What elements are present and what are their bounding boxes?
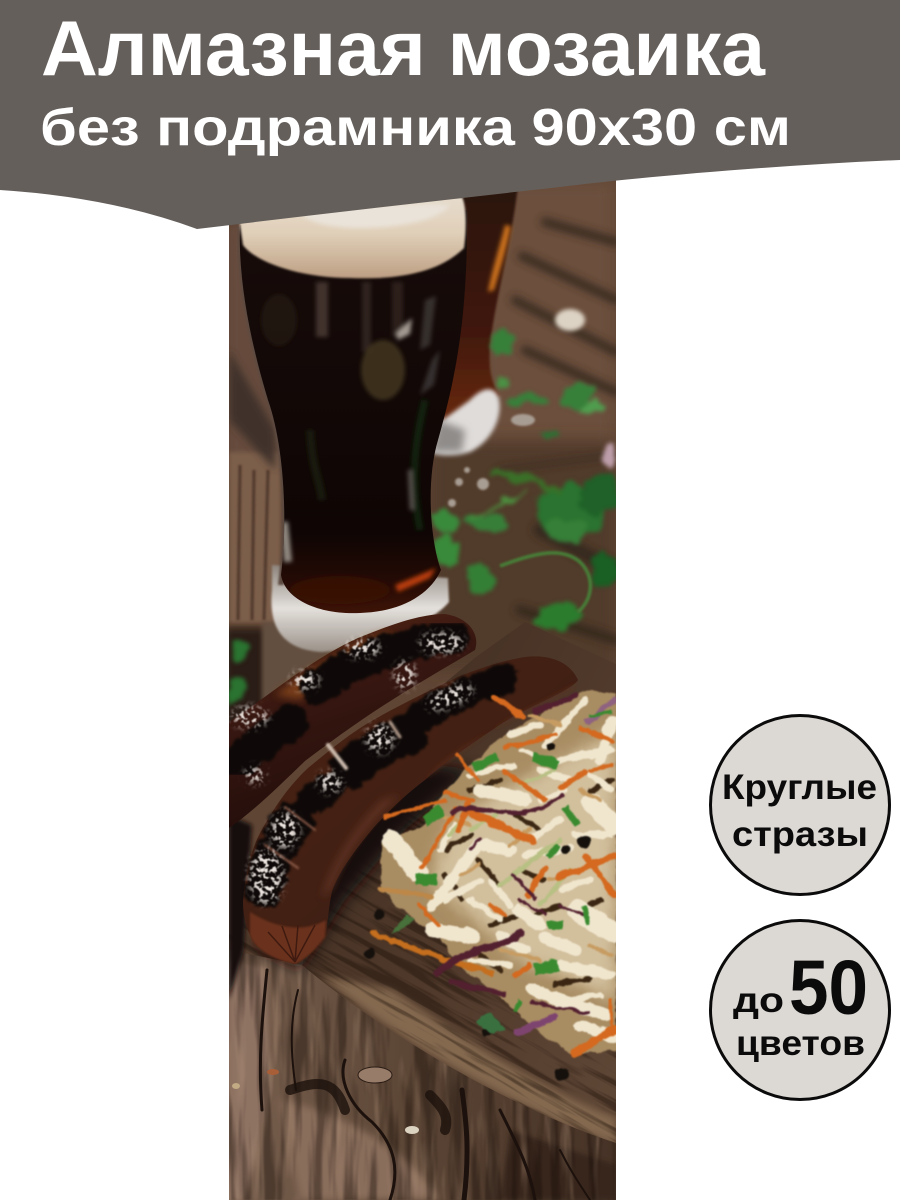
green onion pieces <box>415 712 612 1012</box>
dark gaps <box>445 780 612 985</box>
white crumb <box>555 309 585 331</box>
subtitle: без подрамника 90х30 см <box>40 99 791 157</box>
sausage tip <box>250 912 326 964</box>
cabbage shreds <box>392 700 614 1037</box>
peppercorns and herbs <box>365 743 591 1080</box>
beer body <box>240 210 467 613</box>
char marks <box>264 678 505 888</box>
char marks <box>238 636 452 762</box>
grill slashes <box>265 722 400 868</box>
badge: round rhinestones: Круглые <box>722 768 877 807</box>
glass edge <box>238 225 287 585</box>
salad base <box>380 690 616 1055</box>
herb stem <box>500 553 590 612</box>
shadow under sausages <box>250 760 475 970</box>
salt grains <box>448 414 535 507</box>
coleslaw salad <box>365 690 616 1080</box>
badge: up to 50 colours: до <box>733 981 784 1020</box>
fresh herbs <box>229 331 620 701</box>
title: Алмазная мозаика <box>41 4 766 92</box>
glass reflections <box>261 282 440 604</box>
grilled sausage, back <box>229 614 476 828</box>
board highlight <box>320 975 616 1144</box>
glints <box>249 680 476 904</box>
second beer glass behind <box>431 185 518 455</box>
grilled sausage, front <box>243 656 578 964</box>
badge: up to 50 colours <box>710 920 890 1100</box>
glints <box>232 633 464 783</box>
warm top sheen <box>275 632 400 700</box>
shadow on left side <box>229 815 252 1000</box>
cutting board <box>302 625 616 1052</box>
red cabbage shreds <box>438 696 614 1032</box>
badge: up to 50 colours: 50 <box>789 945 868 1031</box>
badge: round rhinestones <box>710 716 890 894</box>
lower table planks <box>229 950 616 1200</box>
header banner <box>0 0 900 229</box>
glass foot <box>271 565 449 652</box>
badge: up to 50 colours: цветов <box>736 1024 865 1063</box>
photo: beer and grilled sausages on wood <box>229 180 616 1200</box>
carrot shreds <box>372 698 615 1053</box>
pale green stems <box>450 770 570 905</box>
main pint of dark beer <box>238 197 467 652</box>
tan shreds <box>440 715 612 960</box>
background wood, upper table <box>225 180 616 1200</box>
badge: round rhinestones: стразы <box>732 815 868 854</box>
board grain <box>229 818 616 1142</box>
beer foam <box>240 197 466 278</box>
